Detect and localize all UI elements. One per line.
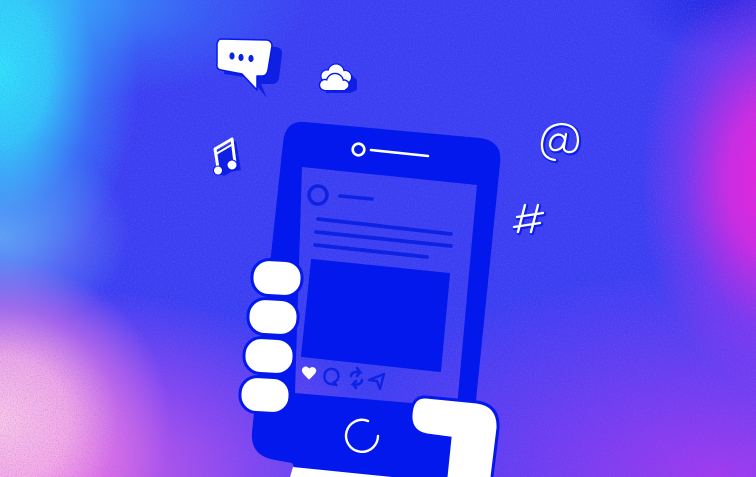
phone body bbox=[252, 122, 500, 477]
icon: music note bbox=[214, 139, 241, 176]
finger 2 bbox=[247, 298, 299, 336]
icon: cloud bbox=[320, 64, 357, 93]
speaker bbox=[371, 150, 428, 156]
sleeve bbox=[290, 467, 392, 477]
icon: share arrows bbox=[351, 368, 362, 388]
avatar bbox=[309, 186, 327, 204]
cloud shadow bbox=[325, 72, 357, 93]
icon: at sign bbox=[542, 124, 579, 161]
rear cloud bbox=[321, 64, 352, 84]
typing dots bbox=[229, 52, 254, 62]
home button bbox=[346, 420, 378, 452]
hand bbox=[239, 259, 498, 477]
finger 4 bbox=[239, 376, 291, 414]
icon: hash sign bbox=[514, 205, 544, 233]
icon: like heart bbox=[302, 367, 316, 379]
icon: speech bubble bbox=[217, 39, 282, 98]
icon: send bbox=[369, 374, 384, 389]
post image bbox=[302, 260, 449, 371]
front cloud bbox=[320, 74, 349, 90]
finger 1 bbox=[251, 259, 303, 297]
note shadow bbox=[218, 141, 241, 176]
thumb bbox=[411, 397, 498, 477]
phone bbox=[252, 122, 500, 477]
post text lines bbox=[315, 219, 451, 257]
finger 3 bbox=[243, 337, 295, 375]
camera bbox=[353, 144, 364, 155]
name line bbox=[340, 196, 372, 199]
icon: comment bbox=[324, 369, 338, 385]
